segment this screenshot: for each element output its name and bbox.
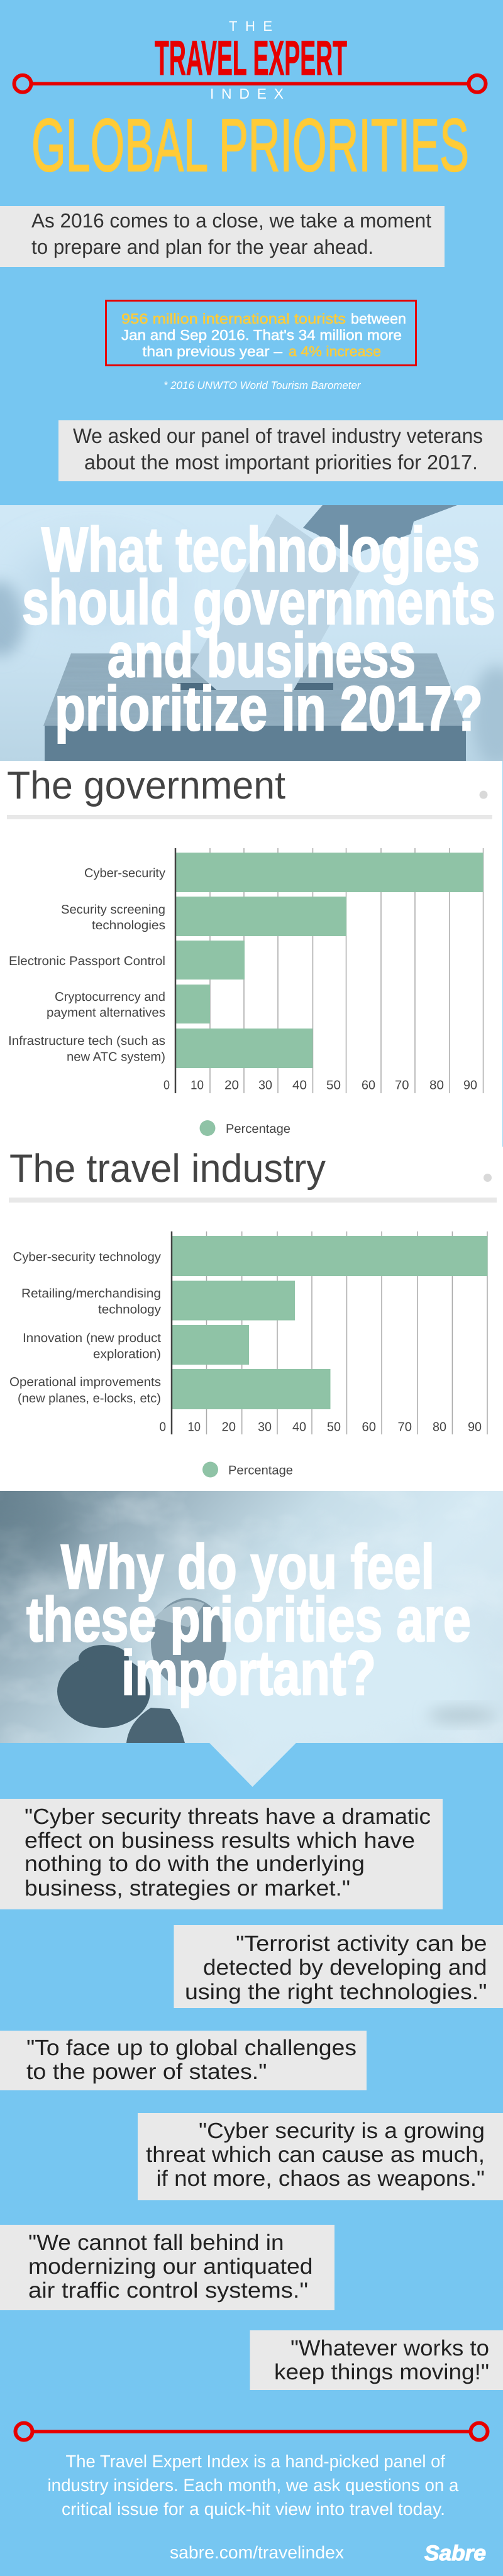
heading: The government: The government: [7, 764, 285, 807]
quote 5: "We cannot fall behind in: [28, 2230, 284, 2255]
axis numbers: 10: [187, 1420, 201, 1434]
chart legend: [202, 1461, 293, 1478]
quote 2: "Terrorist activity can be: [236, 1931, 487, 1956]
icon: ballot box lid: [43, 653, 466, 726]
axis numbers: 60: [362, 1078, 375, 1092]
axis numbers: 30: [258, 1078, 272, 1092]
axis numbers: 30: [258, 1420, 272, 1434]
category labels: Retailing/merchandising: [21, 1287, 161, 1301]
quote 1: business, strategies or market.": [25, 1876, 350, 1901]
quote 3: [0, 2031, 367, 2090]
edge sliver: [502, 761, 503, 1147]
quote 3: "To face up to global challenges: [26, 2036, 357, 2060]
header logo: The Travel Expert Index: [14, 18, 485, 102]
category labels: Innovation (new product: [23, 1331, 161, 1345]
statistic callout: between: [351, 310, 406, 327]
axis numbers: 80: [433, 1420, 446, 1434]
category labels: technology: [98, 1303, 161, 1317]
pointer band below photo: [0, 1743, 503, 1788]
icon: person: [126, 1708, 185, 1743]
icon: megaphone horn: [57, 1645, 150, 1728]
icon: ballot paper: [191, 514, 360, 690]
axis numbers: 40: [292, 1420, 306, 1434]
section heading: why priorities question: [26, 1532, 471, 1708]
quote 1: "Cyber security threats have a dramatic: [25, 1804, 431, 1829]
logo word: INDEX: INDEX: [210, 85, 284, 102]
panel: white chart section: [0, 761, 503, 1491]
axis numbers: 0: [163, 1078, 170, 1092]
chart legend: Percentage: [228, 1464, 293, 1478]
section heading: technologies question: [22, 515, 495, 744]
source footnote: * 2016 UNWTO World Tourism Barometer: [163, 379, 362, 391]
quote 2: [174, 1925, 503, 2008]
axis numbers: 40: [292, 1078, 307, 1092]
axis numbers: 50: [327, 1420, 341, 1434]
chart legend: Percentage: [226, 1122, 290, 1136]
footer description: industry insiders. Each month, we ask questions on a: [48, 2475, 459, 2495]
statistic callout: a 4% increase: [289, 343, 381, 359]
category labels: Electronic Passport Control: [9, 954, 165, 968]
axis numbers: 50: [326, 1078, 341, 1092]
category labels: Infrastructure tech (such as: [8, 1034, 165, 1048]
quote 1: nothing to do with the underlying: [25, 1852, 365, 1876]
photo panel: megaphone against sky: [0, 1489, 503, 1787]
quote 5: modernizing our antiquated: [28, 2254, 312, 2279]
category labels: Cryptocurrency and: [55, 990, 165, 1004]
quote 2: detected by developing and: [203, 1955, 487, 1980]
axis numbers: [160, 1420, 482, 1434]
intro text box: to prepare and plan for the year ahead.: [31, 236, 373, 258]
section heading: why priorities question: important?: [121, 1638, 376, 1708]
quote 6: keep things moving!": [274, 2360, 489, 2384]
axis numbers: 90: [468, 1420, 482, 1434]
panel question text box: about the most important priorities for 2017.: [84, 450, 478, 474]
chart section: the travel industry: [9, 1147, 497, 1478]
chart legend: [200, 1120, 290, 1136]
axis numbers: 0: [160, 1420, 166, 1434]
statistic callout: than previous year –: [142, 343, 282, 359]
intro text box: [0, 206, 445, 267]
footer description: The Travel Expert Index is a hand-picked panel of: [65, 2452, 445, 2471]
statistic callout: 956 million international tourists: [121, 310, 346, 327]
footer divider line with ring ends: [15, 2423, 488, 2440]
icon: ballot slots: [177, 683, 333, 690]
category labels: [8, 866, 165, 1064]
panel question text box: [58, 420, 503, 481]
category labels: new ATC system): [67, 1051, 165, 1064]
quote 2: using the right technologies.": [185, 1980, 487, 2004]
quote 1: effect on business results which have: [25, 1828, 415, 1853]
axis numbers: 70: [397, 1420, 412, 1434]
logo word: THE: THE: [229, 18, 272, 34]
quote 3: to the power of states.": [26, 2060, 267, 2084]
chart section: the government: [7, 764, 492, 1136]
icon: hand: [303, 505, 457, 557]
quote 4: threat which can cause as much,: [146, 2142, 485, 2167]
quote 4: [138, 2113, 503, 2200]
category labels: Operational improvements: [9, 1375, 161, 1389]
intro text box: As 2016 comes to a close, we take a moment: [31, 209, 431, 232]
footer link: sabre.com/travelindex: [170, 2543, 344, 2562]
logo line with ring ends: [14, 75, 485, 92]
category labels: [9, 1250, 161, 1405]
quote 6: "Whatever works to: [290, 2336, 489, 2360]
quote 4: if not more, chaos as weapons.": [156, 2166, 485, 2191]
quote 6: [250, 2330, 503, 2390]
axis numbers: 20: [224, 1078, 239, 1092]
axis numbers: 70: [395, 1078, 409, 1092]
category labels: Security screening: [61, 903, 165, 917]
bar chart: government priorities: [8, 848, 483, 1093]
category labels: (new planes, e-locks, etc): [18, 1392, 161, 1405]
category labels: technologies: [92, 919, 165, 932]
quote 4: "Cyber security is a growing: [199, 2119, 485, 2143]
axis numbers: 10: [191, 1078, 204, 1092]
quote 5: [0, 2225, 334, 2310]
statistic callout: Jan and Sep 2016. That's 34 million more: [121, 327, 402, 343]
icon: megaphone cone: [151, 1598, 226, 1688]
axis numbers: 60: [362, 1420, 376, 1434]
quote 5: air traffic control systems.": [28, 2278, 308, 2303]
menu dot: [484, 1174, 492, 1182]
axis numbers: [163, 1078, 477, 1092]
footer description: critical issue for a quick-hit view into travel today.: [62, 2499, 445, 2519]
section heading: technologies question: and business: [108, 620, 416, 690]
logo: Sabre: Sabre: [424, 2541, 486, 2565]
bar chart: travel industry priorities: [9, 1231, 488, 1434]
axis numbers: 20: [221, 1420, 236, 1434]
quote 1: [0, 1799, 443, 1909]
statistic callout: [106, 300, 416, 366]
icon: ballot box front: [45, 726, 466, 761]
footer description: [48, 2452, 459, 2519]
menu dot: [479, 790, 488, 799]
category labels: Cyber-security: [84, 866, 165, 880]
panel question text box: We asked our panel of travel industry veterans: [73, 424, 483, 447]
category labels: Cyber-security technology: [13, 1250, 161, 1264]
axis numbers: 90: [463, 1078, 477, 1092]
photo panel: ballot box: [0, 505, 503, 767]
category labels: exploration): [93, 1347, 161, 1361]
axis numbers: 80: [429, 1078, 444, 1092]
heading: The travel industry: The travel industry: [9, 1147, 326, 1191]
category labels: payment alternatives: [47, 1006, 165, 1020]
